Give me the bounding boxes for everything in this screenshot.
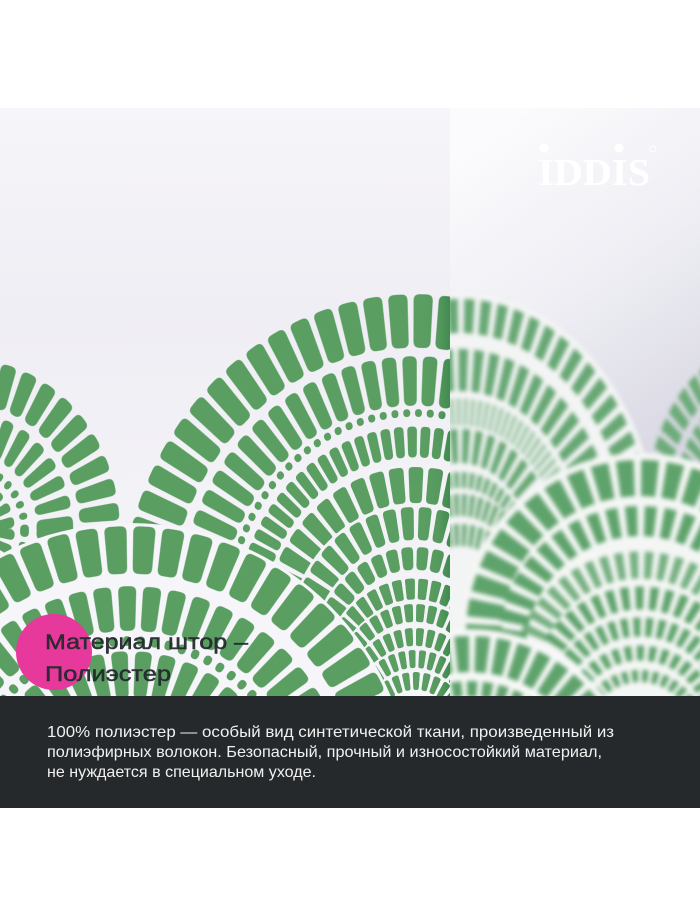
heading: Материал штор – xyxy=(45,630,248,654)
panel: sharp curtain close-up xyxy=(0,108,450,696)
description text xyxy=(47,724,614,781)
pattern: large central scallop xyxy=(132,294,450,696)
description text: не нуждается в специальном уходе. xyxy=(47,764,316,781)
description text: полиэфирных волокон. Безопасный, прочный и износостойкий материал, xyxy=(47,744,602,761)
scallop: bottom left xyxy=(450,626,606,696)
panel: dark description band xyxy=(0,696,700,808)
pattern: left upper scallop xyxy=(0,364,120,552)
scallop: main lower right xyxy=(463,450,700,696)
logo: iddis: IDDIS xyxy=(538,152,650,194)
pattern: lower scallop overlapping the others xyxy=(0,523,391,696)
heading: Полиэстер xyxy=(45,662,171,686)
scallop: upper left xyxy=(450,296,644,632)
pattern: blurred scallops xyxy=(450,296,700,696)
heading xyxy=(45,630,248,686)
scallop: far right xyxy=(652,366,700,464)
description text: 100% полиэстер — особый вид синтетической ткани, произведенный из xyxy=(47,724,614,741)
panel: blurred curtain background xyxy=(450,108,700,696)
icon: pink accent circle xyxy=(16,614,92,690)
